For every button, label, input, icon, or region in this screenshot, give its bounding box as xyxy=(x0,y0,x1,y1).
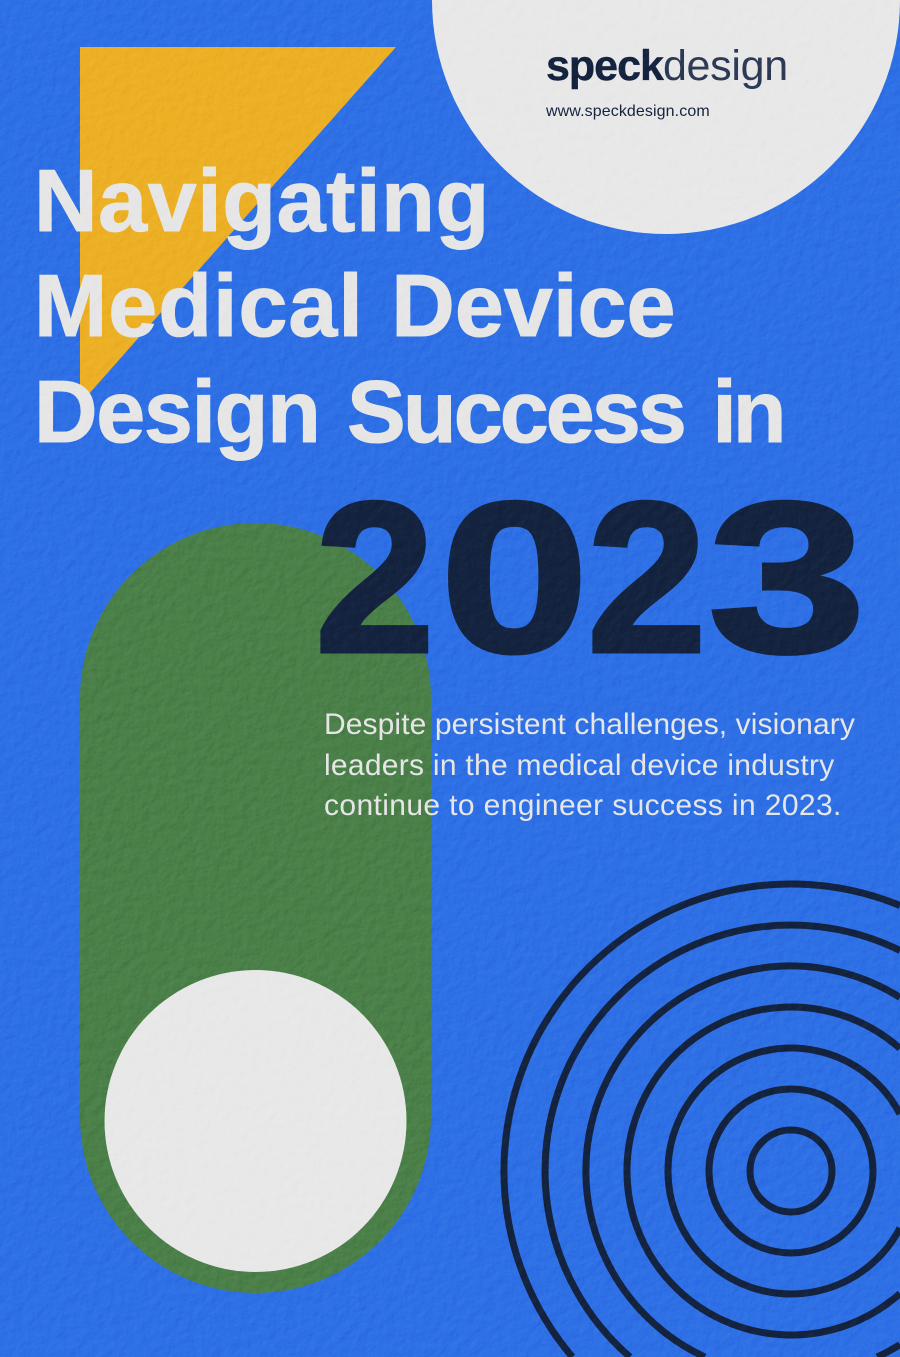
title line 1: Navigating xyxy=(34,151,490,250)
white circle top right xyxy=(432,0,900,234)
year: 0 xyxy=(440,459,589,698)
title line 3: Design Success in xyxy=(34,362,783,461)
subtitle: leaders in the medical device industry xyxy=(324,748,835,782)
year xyxy=(315,459,866,698)
year: 3 xyxy=(708,459,866,698)
year: 2 xyxy=(587,459,707,698)
white circle in pill xyxy=(104,970,406,1272)
subtitle: continue to engineer success in 2023. xyxy=(324,789,842,822)
subtitle: Despite persistent challenges, visionary xyxy=(324,708,855,741)
website url: www.speckdesign.com xyxy=(546,103,710,120)
subtitle xyxy=(324,708,855,822)
title line 2: Medical Device xyxy=(34,256,676,355)
yellow triangle xyxy=(80,47,396,404)
year: 2 xyxy=(315,459,435,698)
green pill xyxy=(80,523,431,1293)
logo: speckdesign xyxy=(546,42,788,90)
concentric circles xyxy=(504,884,900,1357)
